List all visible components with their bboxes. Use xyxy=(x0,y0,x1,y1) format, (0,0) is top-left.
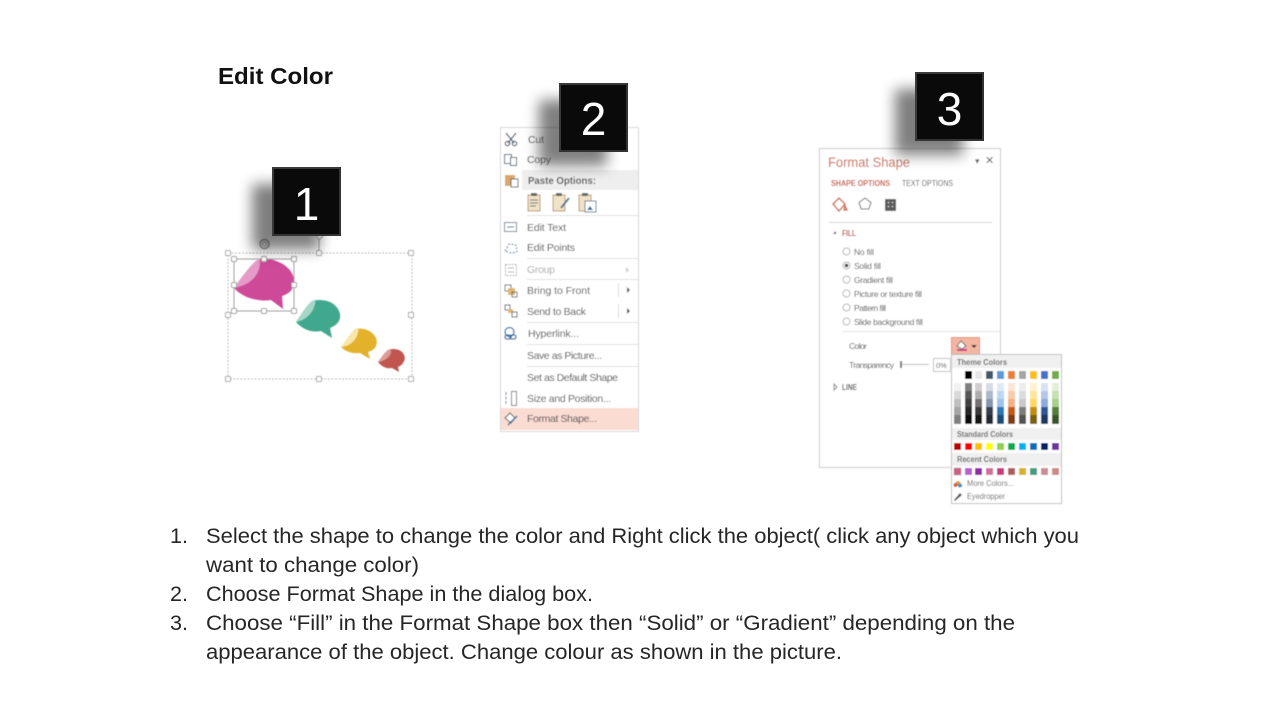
number box 3 xyxy=(895,72,984,155)
icon: format shape xyxy=(505,413,517,425)
menu item labels: Cut xyxy=(528,134,544,146)
icon: edit points xyxy=(505,244,517,253)
icon: size and position xyxy=(506,392,516,406)
transparency control: Transparency xyxy=(849,360,895,370)
fill radio options: Pattern fill xyxy=(854,303,886,313)
fill radio options: Solid fill xyxy=(854,261,881,271)
icon: fill bucket xyxy=(833,198,847,211)
speech bubble: green xyxy=(296,300,340,338)
transparency control xyxy=(849,358,950,372)
speech bubble: red xyxy=(378,349,405,372)
format shape highlight xyxy=(501,408,638,430)
menu item labels: Copy xyxy=(527,154,552,166)
transparency control: 0% xyxy=(936,361,947,370)
color palette dropdown xyxy=(952,354,1062,504)
menu icons xyxy=(504,133,596,425)
fill section heading xyxy=(833,229,856,238)
paste options row xyxy=(522,170,638,190)
instruction list: Choose Format Shape in the dialog box. xyxy=(206,582,593,606)
icon: size properties xyxy=(885,199,896,211)
icon: pentagon xyxy=(859,198,871,209)
instruction list: Select the shape to change the color and Right click the object( click any object which you xyxy=(206,524,1079,548)
group selection frame xyxy=(226,236,414,382)
theme colors row xyxy=(954,371,1059,379)
menu item labels: Paste Options: xyxy=(528,175,596,187)
icon: bring to front xyxy=(505,285,517,297)
number box 1 xyxy=(252,167,341,250)
instruction list xyxy=(170,524,1079,664)
instruction list: Choose “Fill” in the Format Shape box then “Solid” or “Gradient” depending on the xyxy=(206,611,1015,635)
icon: scissors xyxy=(505,133,517,146)
eyedropper option: Eyedropper xyxy=(967,492,1005,501)
fill section heading: FILL xyxy=(842,229,856,238)
menu item labels: Group xyxy=(527,264,555,276)
palette section headers: Standard Colors xyxy=(957,430,1013,439)
icon: hyperlink xyxy=(505,328,516,339)
pane controls: ▾ xyxy=(975,156,980,166)
instruction list: 3. xyxy=(170,611,188,635)
menu item labels: Edit Points xyxy=(527,242,575,254)
fill radio options: Gradient fill xyxy=(854,275,893,285)
palette section headers: Theme Colors xyxy=(957,358,1008,367)
menu item labels: Set as Default Shape xyxy=(527,372,618,384)
panel: step 2 context menu xyxy=(500,128,638,432)
icons: paste options xyxy=(528,193,596,212)
instruction list: 2. xyxy=(170,582,188,606)
number box 2 xyxy=(539,83,628,166)
color button xyxy=(952,338,980,354)
standard colors row xyxy=(954,443,1059,450)
fill radio options xyxy=(843,247,923,327)
number box 2: 2 xyxy=(581,93,606,145)
number box 3: 3 xyxy=(937,83,962,135)
menu separators xyxy=(527,216,638,366)
panel: step 3 format shape pane xyxy=(820,148,1000,468)
pane tabs: SHAPE OPTIONS xyxy=(831,179,891,188)
instruction list: appearance of the object. Change colour as shown in the picture. xyxy=(206,640,842,664)
menu item labels: Format Shape... xyxy=(527,413,597,425)
icon: paste xyxy=(505,175,518,187)
fill radio options: No fill xyxy=(854,247,874,257)
instruction list: want to change color) xyxy=(205,553,419,577)
submenu arrows xyxy=(626,267,630,314)
speech bubble: pink xyxy=(234,259,294,309)
theme color shades xyxy=(954,383,1059,424)
icon: send to back xyxy=(505,305,517,317)
icon: group xyxy=(506,264,516,276)
fill radio options: Slide background fill xyxy=(854,317,923,327)
menu item labels: Edit Text xyxy=(527,222,566,234)
number box 1: 1 xyxy=(294,178,319,230)
panel: step 3 format shape pane: ✕ xyxy=(985,155,994,167)
pane divider xyxy=(829,222,992,224)
menu item labels: Send to Back xyxy=(527,306,587,318)
recent colors row xyxy=(954,468,1059,475)
menu item labels: Size and Position... xyxy=(527,393,611,405)
color label: Color xyxy=(849,341,867,351)
fill radio options: Picture or texture fill xyxy=(854,289,922,299)
palette section headers xyxy=(952,355,1061,466)
title: Edit Color xyxy=(218,63,333,89)
menu item labels: Save as Picture... xyxy=(527,350,602,362)
menu item labels xyxy=(527,134,618,425)
line section heading xyxy=(834,383,858,392)
panel: step 1 selected shapes xyxy=(226,236,414,382)
icon: copy xyxy=(504,154,516,166)
icon: edit text xyxy=(504,222,516,232)
selected shape frame xyxy=(232,256,296,314)
palette section headers: Recent Colors xyxy=(957,455,1008,464)
menu item labels: Hyperlink... xyxy=(528,328,579,340)
panel: step 3 format shape pane: TEXT OPTIONS xyxy=(902,179,953,188)
line section heading: LINE xyxy=(842,383,858,392)
speech bubble: yellow xyxy=(341,329,377,359)
more colors option: More Colors... xyxy=(967,479,1014,488)
pane title: Format Shape xyxy=(828,155,910,170)
instruction list: 1. xyxy=(170,524,188,548)
menu item labels: Bring to Front xyxy=(527,285,590,297)
